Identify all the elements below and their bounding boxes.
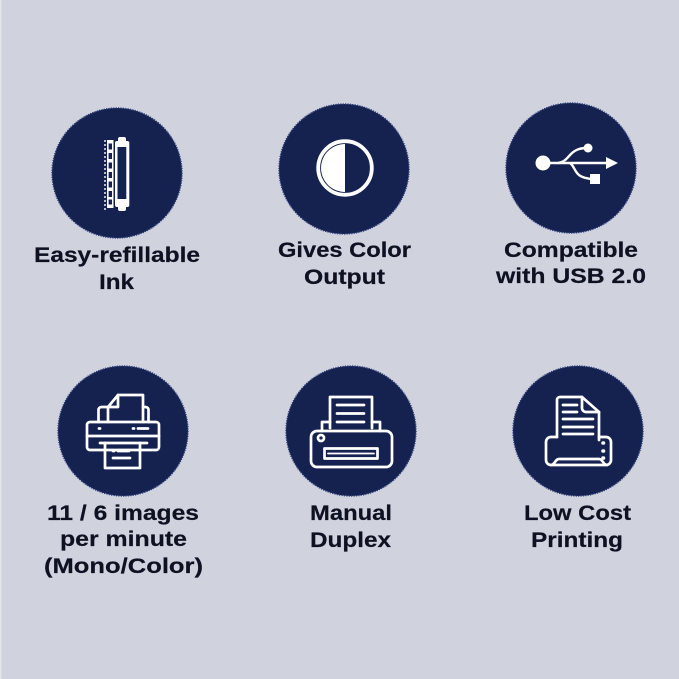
label: images per minute: per minute [60,528,187,551]
label: images per minute: 11 / 6 images [47,502,199,525]
label: low cost printing: Low Cost [524,502,631,525]
label: gives color output [278,239,411,289]
label: compatible with USB 2.0 [495,239,646,288]
feature: low cost printing [513,366,643,552]
feature: easy-refillable ink [34,108,200,294]
label: easy-refillable ink: Easy-refillable [34,244,200,267]
icon: half-filled circle [318,141,372,195]
label: images per minute [44,502,203,578]
label: compatible with USB 2.0: Compatible [504,239,638,262]
feature: print speed [44,366,203,578]
label: images per minute: (Mono/Color) [44,555,203,578]
label: easy-refillable ink: Ink [99,271,134,294]
label: gives color output: Gives Color [278,239,411,262]
label: manual duplex [310,502,392,552]
feature: USB 2.0 [495,103,646,288]
label: low cost printing [524,502,631,552]
icon: printer with front slot [311,397,392,467]
icon: printer with paper [87,395,159,468]
icon: USB symbol [536,144,618,184]
icon: printer with document [546,397,611,465]
label: manual duplex: Duplex [310,529,391,552]
label: compatible with USB 2.0: with USB 2.0 [495,265,646,288]
label: low cost printing: Printing [531,529,623,552]
feature: manual duplex [286,366,416,552]
icon: ink cartridge [105,137,129,211]
label: manual duplex: Manual [310,502,392,525]
label: easy-refillable ink [34,244,200,294]
label: gives color output: Output [304,266,385,289]
feature: colour output [278,104,411,289]
